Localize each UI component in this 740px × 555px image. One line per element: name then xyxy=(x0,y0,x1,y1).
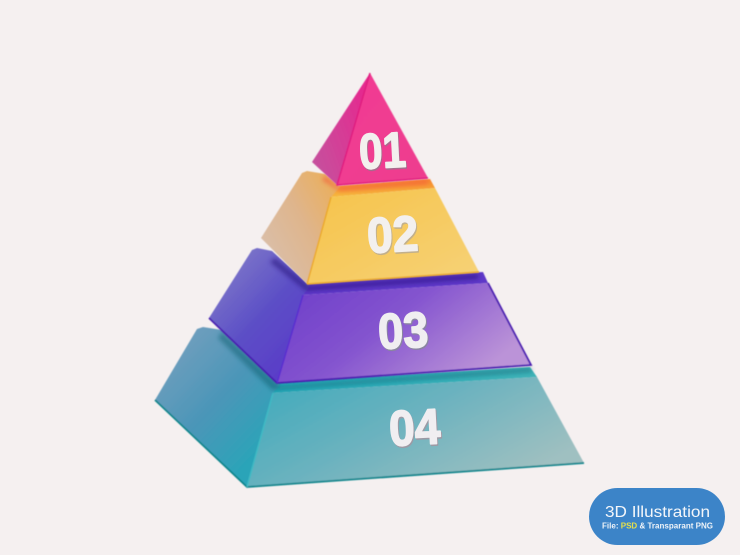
tier 01 xyxy=(312,73,428,185)
tier 04 xyxy=(155,327,584,487)
badge title: 3D Illustration xyxy=(605,504,710,521)
badge: 3D Illustration xyxy=(589,488,725,545)
number 04: 04 xyxy=(388,400,442,457)
number 01: 01 xyxy=(359,123,408,181)
number 03: 03 xyxy=(378,304,431,362)
number 02: 02 xyxy=(366,207,420,264)
tier 03 xyxy=(209,248,531,383)
number 02: 02 xyxy=(367,208,421,266)
tier 02 xyxy=(261,171,479,284)
number 01: 01 xyxy=(358,121,407,180)
number 04: 04 xyxy=(389,401,443,459)
badge subtitle: File: PSD & Transparant PNG xyxy=(602,522,713,530)
number 03: 03 xyxy=(377,302,430,361)
